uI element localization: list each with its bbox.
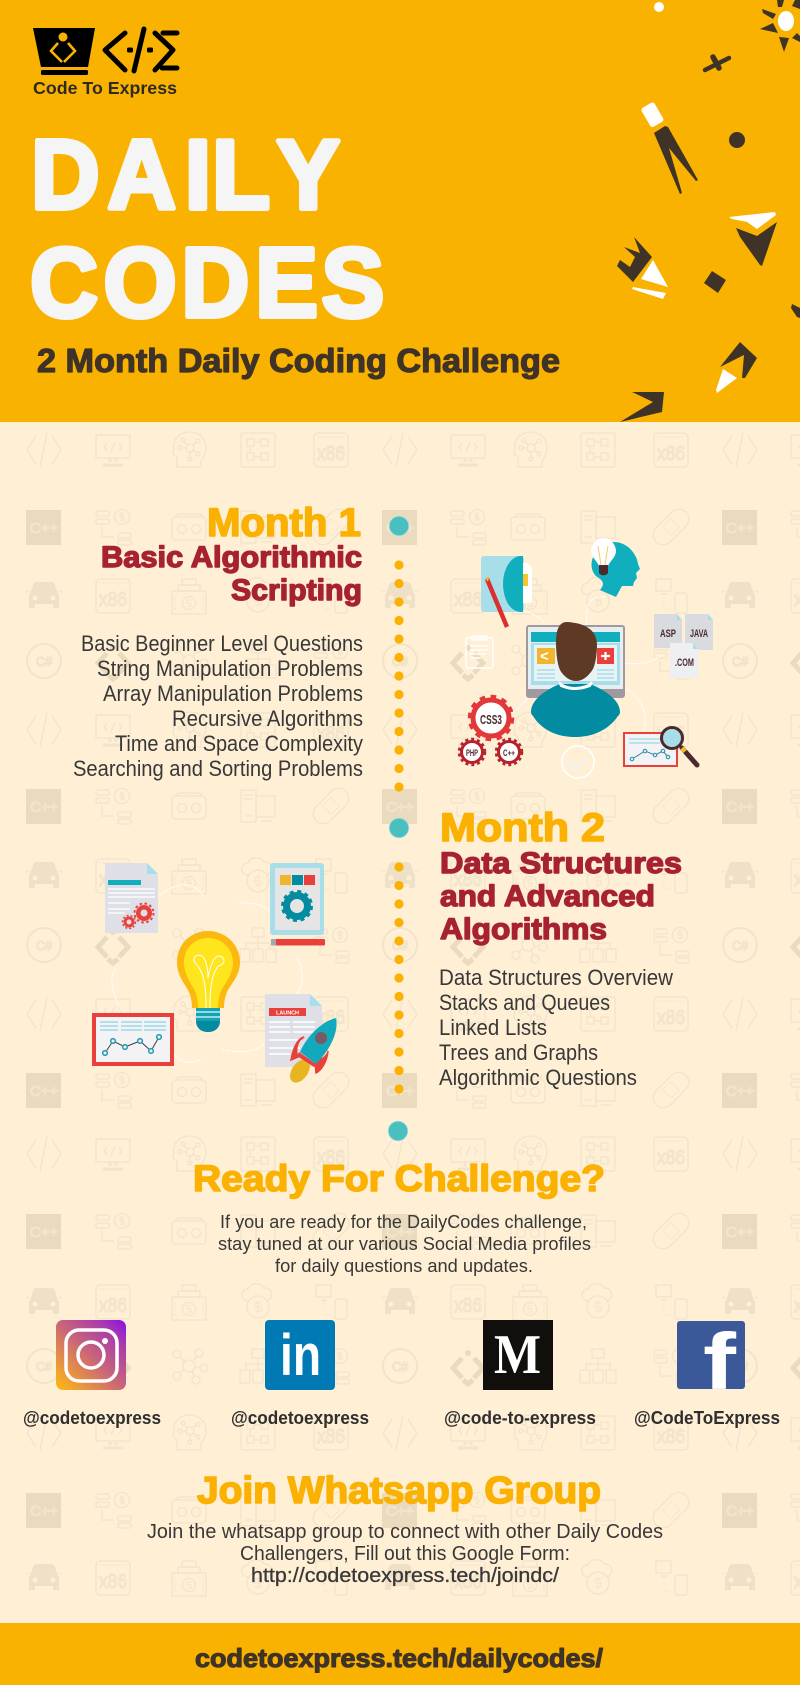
icon: notebook and pencil bbox=[481, 556, 532, 627]
icon: light bulb bbox=[177, 931, 240, 1032]
icon: file type documents: ASP bbox=[660, 628, 676, 640]
list: month 2 topics: Algorithmic Questions bbox=[439, 1065, 637, 1090]
social: instagram bbox=[23, 1320, 161, 1428]
heading: month 1: Month 1 bbox=[207, 501, 361, 545]
subheading: month 2 bbox=[440, 847, 682, 946]
background icon pattern bbox=[26, 432, 800, 1596]
panel: month 1 text bbox=[73, 501, 363, 781]
icon: head with light bulb bbox=[591, 538, 640, 597]
icon: code gears: C++ bbox=[503, 748, 515, 758]
social: facebook: f bbox=[703, 1317, 736, 1406]
text block: join instructions: Join the whatsapp group to connect with other Daily Codes bbox=[147, 1521, 663, 1543]
footer bbox=[0, 1623, 800, 1685]
social: facebook: @CodeToExpress bbox=[634, 1408, 780, 1428]
heading: month 2: Month 2 bbox=[440, 806, 605, 850]
social: medium: M bbox=[494, 1324, 541, 1386]
text block: challenge description bbox=[218, 1211, 591, 1276]
icon: chart with magnifier bbox=[624, 728, 697, 766]
social: linkedin: in bbox=[280, 1323, 321, 1388]
list: month 2 topics bbox=[439, 965, 673, 1090]
panel: join whatsapp group bbox=[147, 1470, 663, 1587]
icon: person bbox=[531, 622, 620, 737]
icon: line chart board bbox=[94, 1015, 172, 1064]
panel: month 2 text bbox=[439, 806, 682, 1090]
heading: join whatsapp: Join Whatsapp Group bbox=[197, 1470, 601, 1512]
title bbox=[30, 121, 384, 338]
illustration: light bulb with ideas bbox=[94, 863, 337, 1086]
heading: ready for challenge: Ready For Challenge? bbox=[193, 1158, 605, 1199]
icon: launch document: LAUNCH bbox=[276, 1010, 299, 1016]
icon: check mark bbox=[562, 746, 594, 778]
icon: tablet with gear bbox=[270, 863, 325, 946]
icon: code gears bbox=[459, 696, 522, 765]
icon: document with gears bbox=[105, 863, 158, 933]
subheading: month 2: Algorithms bbox=[440, 913, 607, 946]
icon: clipboard bbox=[466, 636, 493, 668]
list: month 2 topics: Stacks and Queues bbox=[439, 990, 610, 1015]
icon: file type documents: JAVA bbox=[690, 628, 708, 640]
icon: code gears: CSS3 bbox=[480, 712, 502, 727]
subtitle: 2 Month Daily Coding Challenge bbox=[37, 342, 560, 379]
text block: join instructions: Challengers, Fill out this Google Form: bbox=[240, 1543, 570, 1565]
logo: Code To Express bbox=[33, 78, 177, 98]
social: linkedin: @codetoexpress bbox=[231, 1408, 369, 1428]
icon: laptop: < bbox=[540, 648, 549, 665]
panel: ready for challenge bbox=[193, 1158, 605, 1276]
list: month 1 topics: Searching and Sorting Problems bbox=[73, 756, 363, 781]
social: medium bbox=[444, 1320, 596, 1428]
icon: code gears: PHP bbox=[466, 748, 478, 758]
text block: challenge description: for daily questions and updates. bbox=[275, 1255, 533, 1276]
subheading: month 1: Basic Algorithmic bbox=[101, 541, 362, 574]
list: month 1 topics: Time and Space Complexity bbox=[115, 731, 363, 756]
text block: join instructions bbox=[147, 1521, 663, 1587]
title: DAILY bbox=[31, 121, 340, 230]
timeline bbox=[388, 516, 409, 1141]
text block: join instructions: http://codetoexpress.tech/joindc/ bbox=[251, 1565, 559, 1587]
social: facebook bbox=[634, 1317, 780, 1428]
subheading: month 1 bbox=[101, 541, 362, 607]
social: instagram: @codetoexpress bbox=[23, 1408, 161, 1428]
icon: laptop bbox=[526, 625, 625, 698]
subheading: month 2: and Advanced bbox=[440, 880, 655, 913]
list: month 1 topics bbox=[73, 631, 363, 781]
social: linkedin bbox=[231, 1320, 369, 1428]
list: month 2 topics: Trees and Graphs bbox=[439, 1040, 598, 1065]
list: month 1 topics: String Manipulation Problems bbox=[97, 656, 363, 681]
list: month 1 topics: Basic Beginner Level Questions bbox=[81, 631, 363, 656]
icon: rocket bbox=[286, 1018, 337, 1086]
social: medium: @code-to-express bbox=[444, 1408, 596, 1428]
title: CODES bbox=[30, 229, 384, 338]
illustration: developer at laptop bbox=[459, 538, 713, 778]
decorative confetti icons bbox=[617, 0, 800, 422]
logo bbox=[33, 28, 177, 98]
text block: challenge description: If you are ready for the DailyCodes challenge, bbox=[220, 1211, 587, 1232]
subheading: month 1: Scripting bbox=[231, 574, 362, 607]
text block: challenge description: stay tuned at our various Social Media profiles bbox=[218, 1233, 591, 1254]
panel: header bbox=[0, 0, 800, 422]
icon: launch document bbox=[265, 994, 322, 1067]
list: month 2 topics: Linked Lists bbox=[439, 1015, 547, 1040]
icon: file type documents bbox=[654, 614, 713, 678]
subheading: month 2: Data Structures bbox=[440, 847, 682, 880]
list: month 1 topics: Recursive Algorithms bbox=[172, 706, 363, 731]
list: month 1 topics: Array Manipulation Problems bbox=[103, 681, 363, 706]
footer: codetoexpress.tech/dailycodes/ bbox=[195, 1643, 603, 1673]
icon: file type documents: .COM bbox=[675, 657, 694, 669]
list: month 2 topics: Data Structures Overview bbox=[439, 965, 673, 990]
